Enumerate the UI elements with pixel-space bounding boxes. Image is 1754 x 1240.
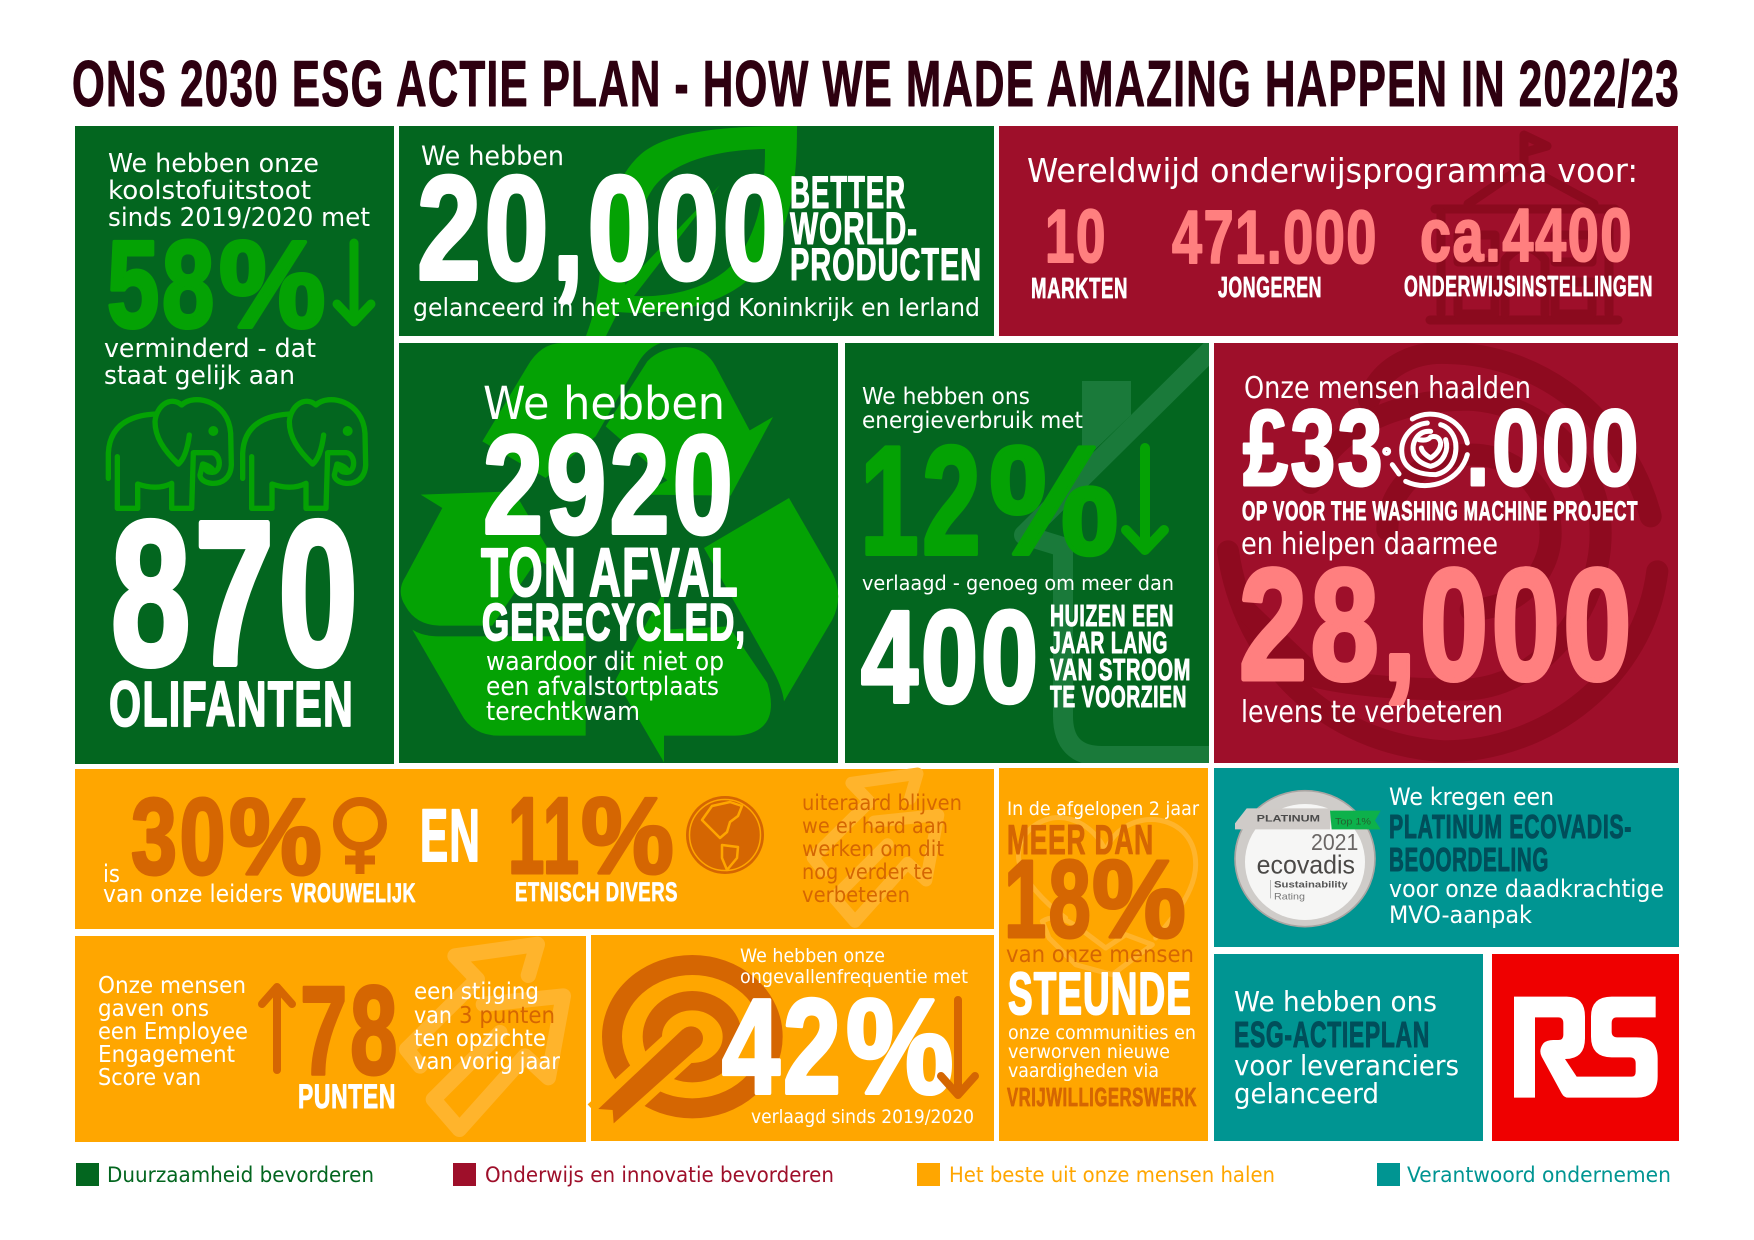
body text [1389, 875, 1664, 929]
heading text: Wereldwijd onderwijsprogramma voor: [1027, 151, 1638, 190]
body text: waardoor dit niet op [486, 647, 724, 677]
text is van onze leiders: van onze leiders [103, 880, 283, 908]
stat 58%: 58 [107, 217, 217, 354]
text right: ten opzichte [414, 1026, 546, 1052]
text is van onze leiders: is [103, 860, 120, 888]
stat 12%: % [989, 414, 1123, 587]
stats: ca.4400 [1420, 193, 1633, 277]
legend item: responsible business: Verantwoord ondernemen [1407, 1163, 1671, 1187]
label steunde: STEUNDE [1008, 961, 1192, 1027]
icon: ecovadis medal: 2021 [1311, 829, 1358, 855]
panel: education programme [999, 126, 1678, 336]
text right: 3 punten [459, 1003, 555, 1029]
body text: vaardigheden via [1008, 1060, 1159, 1082]
label platinum ecovadis: PLATINUM ECOVADIS- [1389, 808, 1632, 845]
text left: Score van [98, 1065, 201, 1091]
intro text: ongevallenfrequentie met [740, 966, 968, 988]
intro text [740, 945, 968, 988]
text left: Onze mensen [98, 973, 246, 999]
caption: verlaagd sinds 2019/2020 [751, 1106, 974, 1128]
text van onze mensen: van onze mensen [1006, 942, 1194, 968]
watermark arrow [407, 944, 563, 1129]
stat 20,000: 20,000 [417, 146, 790, 311]
legend [76, 1163, 1671, 1187]
intro text: We hebben [421, 141, 564, 172]
stat 30% [131, 776, 325, 898]
note: nog verder te [802, 860, 933, 884]
text left: gaven ons [98, 996, 209, 1022]
icon: ecovadis medal [1235, 791, 1381, 927]
follow-up text: verminderd - dat [104, 334, 316, 364]
body text: verworven nieuwe [1008, 1041, 1170, 1063]
caption: gelanceerd in het Verenigd Koninkrijk en Ierland [413, 293, 980, 322]
panel: better world products [399, 126, 994, 336]
icon: ecovadis medal: Top 1% [1335, 817, 1371, 827]
panel: employee engagement [75, 936, 586, 1142]
body text: voor onze daadkrachtige [1389, 875, 1664, 903]
note: uiteraard blijven [802, 791, 962, 815]
label vrijwilligerswerk: VRIJWILLIGERSWERK [1007, 1082, 1197, 1112]
body text: en hielpen daarmee [1241, 527, 1498, 562]
arrow up [262, 987, 292, 1070]
stat 11%: % [581, 775, 677, 897]
intro text: In de afgelopen 2 jaar [1007, 798, 1199, 820]
body text: gelanceerd [1234, 1077, 1379, 1110]
text we kregen een: We kregen een [1389, 783, 1554, 811]
panel: washing machine project [1214, 343, 1678, 763]
stat 58% [107, 217, 329, 354]
body text [1008, 1022, 1196, 1082]
body text: een afvalstortplaats [486, 672, 719, 702]
label gerecycled: GERECYCLED, [482, 594, 746, 652]
stat 28,000: 28,000 [1239, 537, 1635, 713]
stat 000: .000 [1466, 387, 1641, 508]
intro text [862, 384, 1083, 434]
arrow down [941, 1000, 975, 1095]
note [802, 791, 962, 907]
icon: RS logo [1514, 997, 1658, 1098]
stat 33: £33 [1243, 387, 1385, 508]
stat 18%: % [1092, 838, 1189, 961]
label vrouwelijk: VROUWELIJK [291, 878, 416, 908]
label better world producten: BETTER [790, 167, 906, 218]
text left: Engagement [98, 1042, 235, 1068]
stat 58%: % [219, 217, 329, 354]
stat 12% [860, 414, 1123, 587]
note: verbeteren [802, 883, 910, 907]
text right [414, 979, 560, 1075]
text right: van vorig jaar [414, 1049, 560, 1075]
text is van onze leiders [103, 860, 283, 908]
panel: leadership diversity [75, 769, 994, 929]
body text: terechtkwam [486, 697, 640, 727]
label meer dan: MEER DAN [1007, 816, 1154, 863]
label olifanten: OLIFANTEN [109, 668, 354, 740]
arrow down [1126, 448, 1164, 550]
label en: EN [420, 794, 481, 877]
follow-up text [104, 334, 316, 391]
stats: 471.000 [1172, 195, 1378, 279]
stat 42%: % [846, 971, 957, 1122]
body text [486, 647, 724, 727]
stat 42%: 42 [722, 971, 844, 1122]
watermark heart in hand [1018, 817, 1196, 975]
text left: een Employee [98, 1019, 248, 1045]
text right: een stijging [414, 979, 539, 1005]
panel: energy [845, 336, 1225, 763]
caption: levens te verbeteren [1241, 695, 1503, 730]
stats [1045, 193, 1633, 279]
text we hebben ons: We hebben ons [1234, 985, 1437, 1018]
stat 870: 870 [111, 479, 362, 708]
stat 42% [722, 971, 957, 1122]
intro text: We hebben ons [862, 384, 1030, 410]
legend item: sustainability: Duurzaamheid bevorderen [107, 1163, 374, 1187]
label huizen: HUIZEN EEN [1050, 598, 1174, 633]
stats: 10 [1045, 194, 1107, 278]
intro text: We hebben [483, 377, 725, 430]
icon: elephants [108, 400, 366, 508]
intro text: koolstofuitstoot [108, 176, 311, 206]
legend item: people: Het beste uit onze mensen halen [949, 1163, 1275, 1187]
panel: accident frequency [591, 935, 994, 1141]
label esg-actieplan: ESG-ACTIEPLAN [1234, 1014, 1430, 1055]
label huizen: VAN STROOM [1050, 652, 1191, 687]
label ton afval: TON AFVAL [481, 534, 739, 611]
icon: recycle symbol [401, 343, 838, 762]
label better world producten: PRODUCTEN [790, 239, 982, 290]
stat labels: MARKTEN [1031, 273, 1128, 305]
intro text: energieverbruik met [862, 408, 1083, 434]
text left [98, 973, 248, 1091]
body text: voor leveranciers [1234, 1049, 1459, 1082]
stat 18%: 18 [1004, 838, 1093, 961]
panel: volunteering [999, 768, 1208, 1141]
intro text: sinds 2019/2020 met [108, 203, 370, 233]
intro text: We hebben onze [740, 945, 885, 967]
icon: globe [686, 796, 764, 874]
intro text [108, 149, 370, 233]
icon: leaf [586, 126, 797, 336]
stat 30%: 30 [131, 776, 228, 898]
panel: RS logo [1492, 954, 1679, 1141]
stat labels [1031, 271, 1653, 305]
panel: supplier action plan [1214, 954, 1483, 1141]
icon: ecovadis medal: ecovadis [1257, 849, 1355, 879]
icon: target [598, 965, 773, 1123]
label platinum ecovadis: BEOORDELING [1389, 841, 1549, 878]
label etnisch divers: ETNISCH DIVERS [515, 877, 678, 907]
label better world producten: WORLD- [790, 203, 918, 254]
icon: ecovadis medal: Rating [1274, 891, 1305, 901]
panel: ecovadis [1214, 768, 1679, 947]
follow-up text: staat gelijk aan [104, 361, 295, 391]
stat 30%: % [229, 776, 325, 898]
body text [1234, 1049, 1459, 1110]
intro text: Onze mensen haalden [1244, 371, 1531, 406]
arrow down [337, 243, 371, 322]
stat 78: 78 [300, 960, 400, 1101]
icon: ecovadis medal: Sustainability [1274, 880, 1349, 890]
note: we er hard aan [802, 814, 948, 838]
label platinum ecovadis [1389, 808, 1632, 878]
label punten: PUNTEN [298, 1078, 396, 1116]
label huizen [1050, 598, 1191, 714]
icon: ecovadis medal: PLATINUM [1257, 813, 1320, 823]
background spiral [1228, 353, 1657, 751]
stat 11%: 11 [508, 775, 581, 897]
body text: MVO-aanpak [1389, 901, 1532, 929]
text right: van [414, 1003, 452, 1029]
label huizen: JAAR LANG [1050, 625, 1168, 660]
intro text: We hebben onze [108, 149, 319, 179]
icon: female symbol [338, 802, 382, 874]
watermark arrow [813, 774, 938, 922]
stat 12%: 12 [860, 414, 984, 587]
label better world producten [790, 167, 982, 290]
icon: house [1024, 336, 1225, 756]
stat 400: 400 [861, 583, 1041, 730]
stat 2920: 2920 [483, 406, 736, 563]
stat 18% [1004, 838, 1189, 961]
note: werken om dit [802, 837, 944, 861]
icon: washing machine heart [1385, 414, 1467, 486]
panel: carbon reduction [75, 126, 394, 764]
panel: recycling [399, 343, 838, 763]
body text: onze communities en [1008, 1022, 1196, 1044]
legend item: education: Onderwijs en innovatie bevorderen [485, 1163, 834, 1187]
caption: verlaagd - genoeg om meer dan [862, 571, 1174, 595]
label huizen: TE VOORZIEN [1050, 679, 1187, 714]
icon: school [1430, 135, 1618, 320]
stat labels: JONGEREN [1218, 272, 1322, 304]
